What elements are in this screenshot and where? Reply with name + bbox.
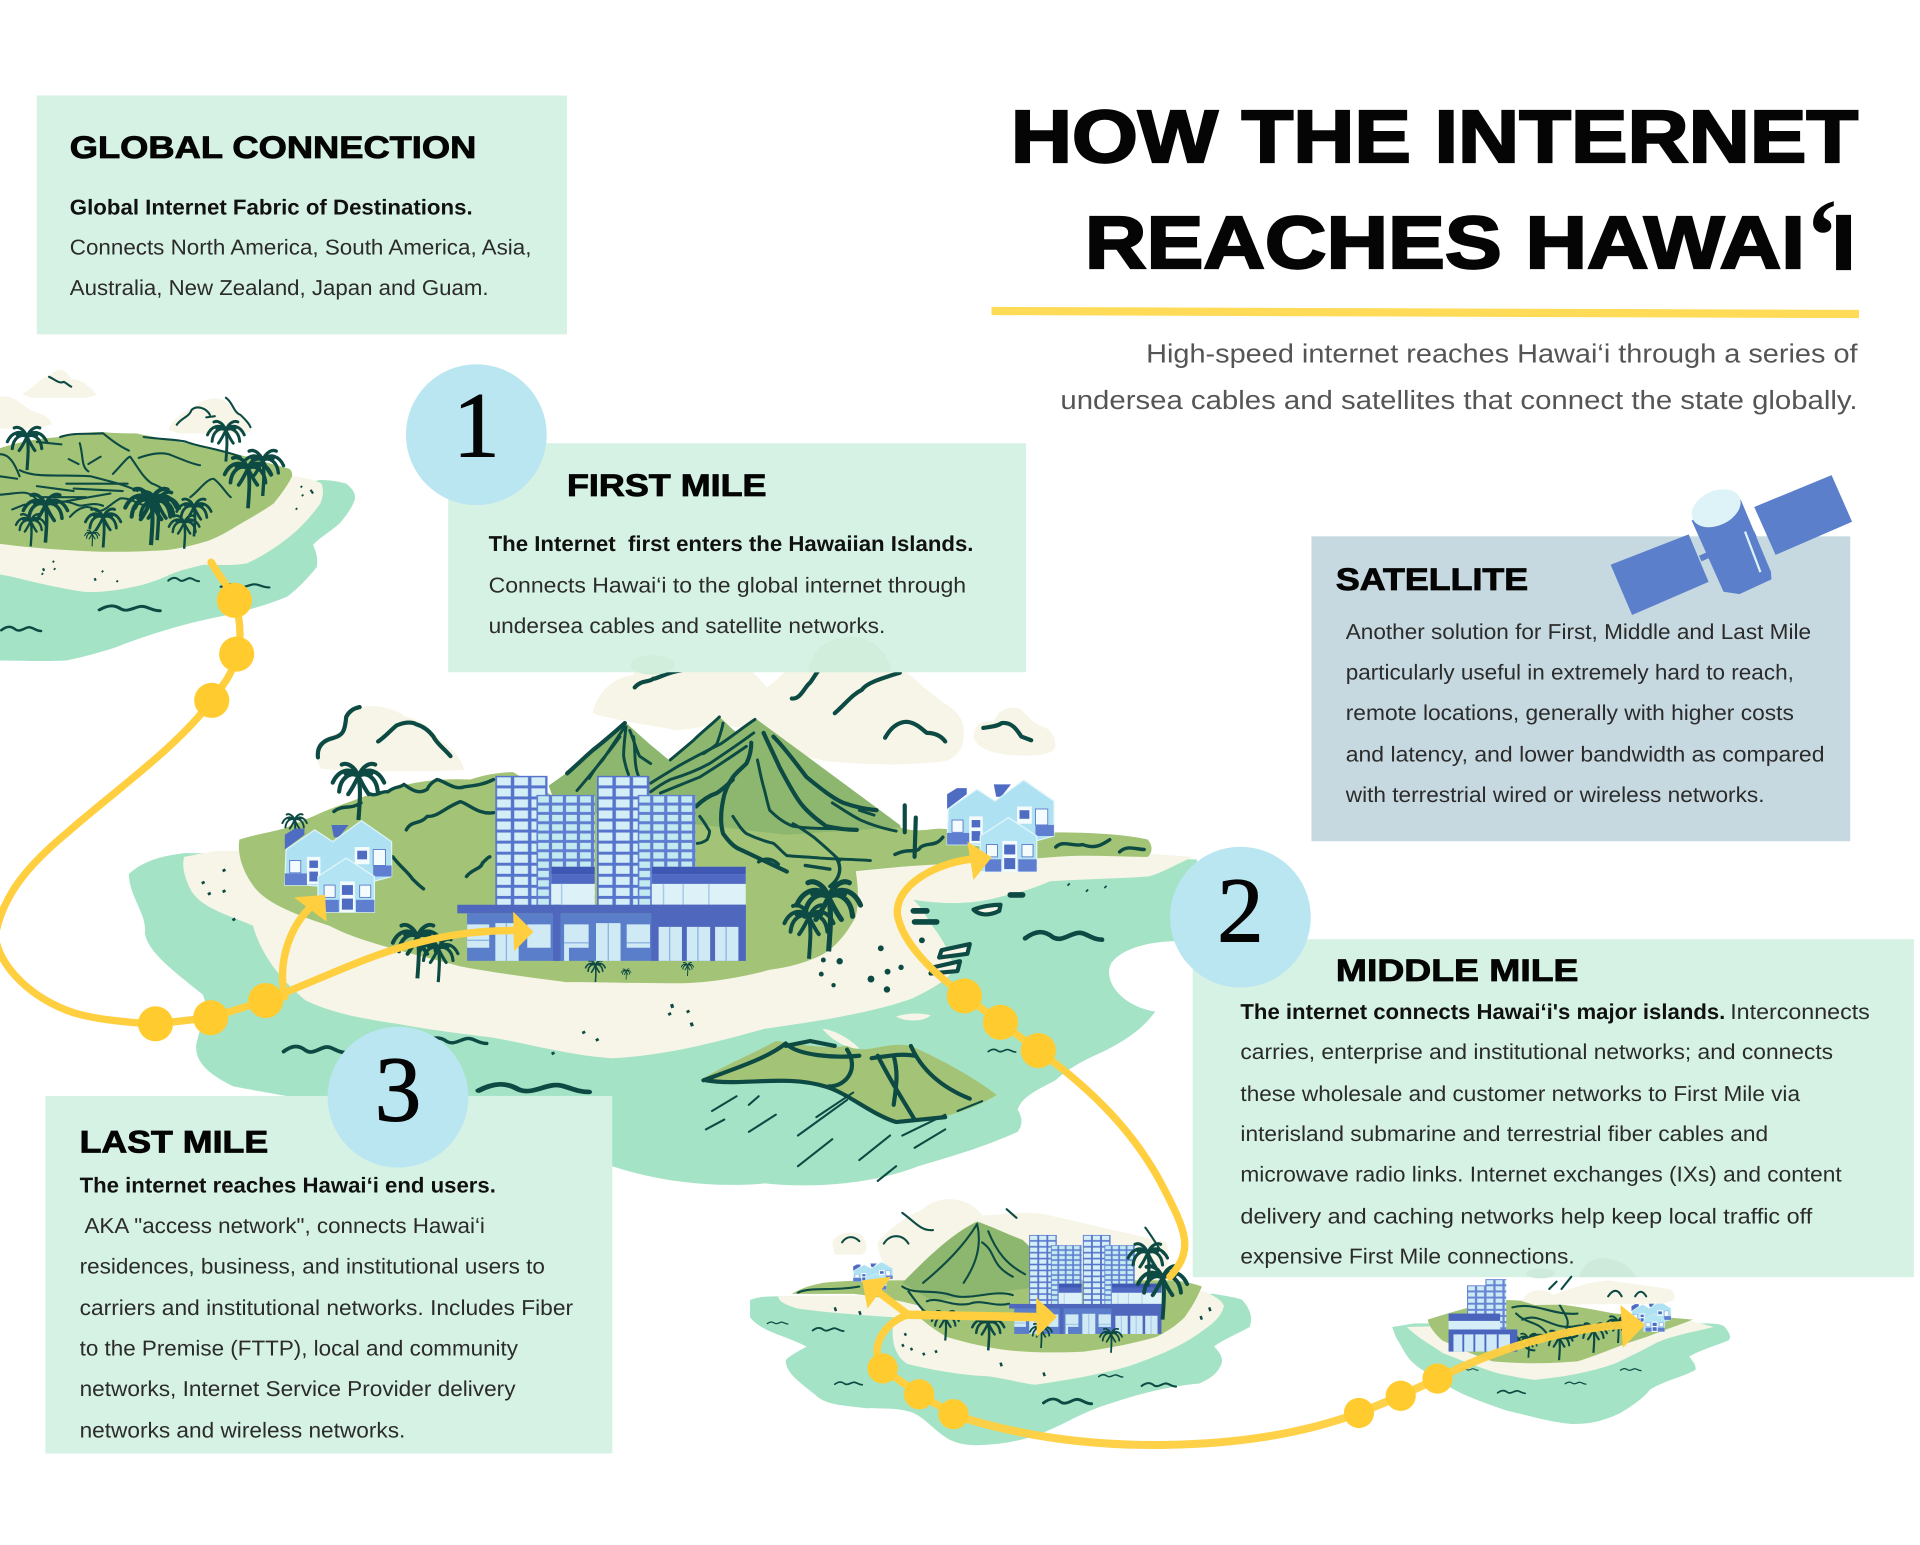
body text: and latency, and lower bandwidth as compared xyxy=(1346,742,1825,767)
badge 1: 1 xyxy=(453,375,500,478)
body text: these wholesale and customer networks to First Mile via xyxy=(1240,1081,1800,1106)
arrowheads xyxy=(967,842,992,880)
body text: The internet reaches Hawai‘i end users. xyxy=(80,1173,496,1198)
icon: satellite xyxy=(1611,475,1852,615)
badge 1 xyxy=(406,364,547,505)
title: REACHES HAWAI xyxy=(1085,201,1805,284)
panel: satellite xyxy=(1311,536,1850,841)
body text: The Internet first enters the Hawaiian Islands. xyxy=(489,531,973,556)
badge 2: 2 xyxy=(1217,860,1264,962)
body text: particularly useful in extremely hard to reach, xyxy=(1346,660,1794,684)
neighbor island cloud xyxy=(1522,1277,1675,1305)
body text: residences, business, and institutional users to xyxy=(80,1254,545,1278)
route dots xyxy=(138,583,283,1041)
heading: MIDDLE MILE xyxy=(1336,954,1578,988)
arrowheads xyxy=(294,895,533,951)
badge 3 xyxy=(328,1027,468,1168)
body text: networks and wireless networks. xyxy=(80,1418,405,1442)
body text xyxy=(489,531,973,638)
islet xyxy=(701,1041,997,1181)
heading: LAST MILE xyxy=(80,1125,268,1160)
body text: with terrestrial wired or wireless networks. xyxy=(1344,782,1765,807)
title: I xyxy=(1833,201,1854,284)
body text xyxy=(70,195,531,300)
land vegetation xyxy=(334,780,1144,889)
body text: remote locations, generally with higher costs xyxy=(1346,700,1794,725)
illustration: Oʻahu style island xyxy=(750,1199,1251,1445)
illustration: top-left origin island xyxy=(0,370,355,661)
clouds above main island xyxy=(316,643,1055,771)
yellow route: Middle Mile cable xyxy=(897,842,1185,1277)
panel: last mile xyxy=(45,1096,612,1453)
heading: GLOBAL CONNECTION xyxy=(70,131,476,165)
body text: Global Internet Fabric of Destinations. xyxy=(70,195,473,219)
route dots xyxy=(947,978,1056,1068)
body text: microwave radio links. Internet exchanges (IXs) and content xyxy=(1240,1162,1842,1187)
faint clouds on middle mile panel xyxy=(1526,1258,1636,1278)
yellow route: First Mile cable xyxy=(0,562,533,1041)
body text: Interconnects xyxy=(1730,999,1870,1024)
body text: Connects Hawai‘i to the global internet through xyxy=(489,573,966,598)
subtitle: undersea cables and satellites that connect the state globally. xyxy=(1060,386,1858,415)
body text: carriers and institutional networks. Includes Fiber xyxy=(80,1296,573,1320)
illustration: neighbor island xyxy=(1392,1279,1730,1424)
body text: expensive First Mile connections. xyxy=(1240,1244,1575,1269)
body text: interisland submarine and terrestrial fiber cables and xyxy=(1240,1122,1768,1146)
body text: The internet connects Hawai‘i's major islands. xyxy=(1240,999,1725,1024)
illustration: main Hawaiian island xyxy=(129,643,1197,1185)
yellow route: Last Mile cable xyxy=(862,1277,1645,1445)
body text: AKA "access network", connects Hawai‘i xyxy=(84,1213,485,1238)
main island city buildings xyxy=(457,776,746,961)
mountain ridges xyxy=(567,717,916,872)
title: ‘ xyxy=(1805,179,1840,294)
badge 2 xyxy=(1170,847,1311,988)
body text: undersea cables and satellite networks. xyxy=(489,613,885,638)
subtitle: High-speed internet reaches Hawai‘i through a series of xyxy=(1146,339,1858,369)
right housing cluster xyxy=(947,780,1054,872)
badge 3: 3 xyxy=(375,1038,421,1141)
body text: Connects North America, South America, Asia, xyxy=(70,235,531,260)
body text: to the Premise (FTTP), local and community xyxy=(80,1336,518,1360)
body text: delivery and caching networks help keep local traffic off xyxy=(1240,1204,1812,1228)
vegetation lines xyxy=(0,433,241,517)
left housing cluster xyxy=(285,821,392,912)
body text xyxy=(80,1173,573,1442)
body text: carries, enterprise and institutional networks; and connects xyxy=(1240,1040,1833,1064)
arrowheads xyxy=(862,1277,1645,1348)
heading: SATELLITE xyxy=(1336,563,1528,598)
panel: first mile xyxy=(448,443,1026,672)
title: HOW THE INTERNET xyxy=(1011,95,1858,178)
subtitle xyxy=(1060,339,1858,415)
panel: middle mile xyxy=(1193,939,1914,1277)
body text xyxy=(1240,999,1870,1269)
body text: Australia, New Zealand, Japan and Guam. xyxy=(70,276,489,300)
body text: networks, Internet Service Provider delivery xyxy=(80,1376,516,1401)
route dots xyxy=(868,1353,1453,1429)
faint clouds on panel xyxy=(631,637,891,675)
rocks and waves xyxy=(931,905,1000,973)
body text xyxy=(1344,620,1825,807)
body text: Another solution for First, Middle and Last Mile xyxy=(1346,620,1811,644)
panel: global connection xyxy=(37,96,567,334)
beach speckles xyxy=(203,869,1106,1055)
title xyxy=(1011,95,1858,294)
title underline xyxy=(992,311,1859,314)
heading: FIRST MILE xyxy=(567,469,767,503)
